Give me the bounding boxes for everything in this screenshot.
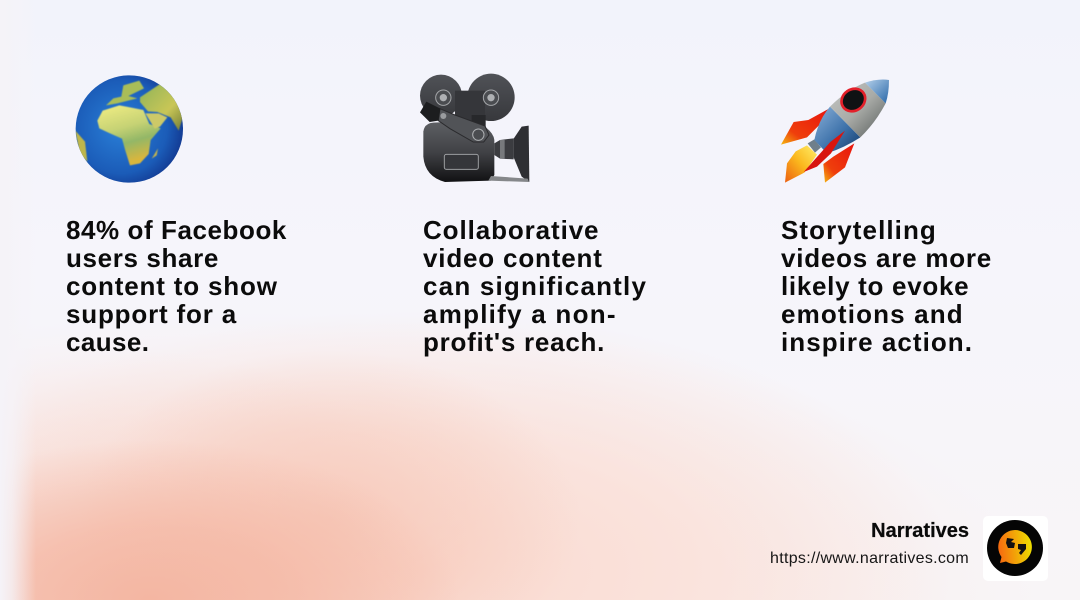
icon: film camera (420, 74, 530, 182)
logo (983, 516, 1048, 581)
text: collaborative video: video content (423, 243, 603, 273)
text: storytelling videos: inspire action. (781, 327, 973, 357)
arabia (145, 113, 167, 129)
icon: globe (76, 75, 183, 183)
africa (97, 105, 161, 165)
icon: rocket (781, 80, 889, 183)
text: storytelling videos: Storytelling (781, 215, 937, 245)
text: Facebook stat: 84% of Facebook (66, 215, 287, 245)
text: storytelling videos: likely to evoke (781, 271, 969, 301)
text: collaborative video: profit's reach. (423, 327, 605, 357)
madagascar (152, 148, 158, 159)
brand url: https://www.narratives.com (770, 550, 969, 567)
text: Facebook stat (66, 215, 287, 357)
asia (140, 84, 184, 131)
text: Facebook stat: support for a (66, 299, 237, 329)
text: collaborative video (423, 215, 647, 357)
text: Facebook stat: users share (66, 243, 219, 273)
text: Facebook stat: content to show (66, 271, 278, 301)
text: collaborative video: Collaborative (423, 215, 599, 245)
text: storytelling videos: emotions and (781, 299, 964, 329)
europe (106, 81, 144, 105)
text: storytelling videos (781, 215, 992, 357)
text: storytelling videos: videos are more (781, 243, 992, 273)
brand name: Narratives (871, 520, 969, 542)
text: Facebook stat: cause. (66, 327, 149, 357)
text: collaborative video: can significantly (423, 271, 647, 301)
south america (75, 131, 87, 162)
text: collaborative video: amplify a non- (423, 299, 617, 329)
